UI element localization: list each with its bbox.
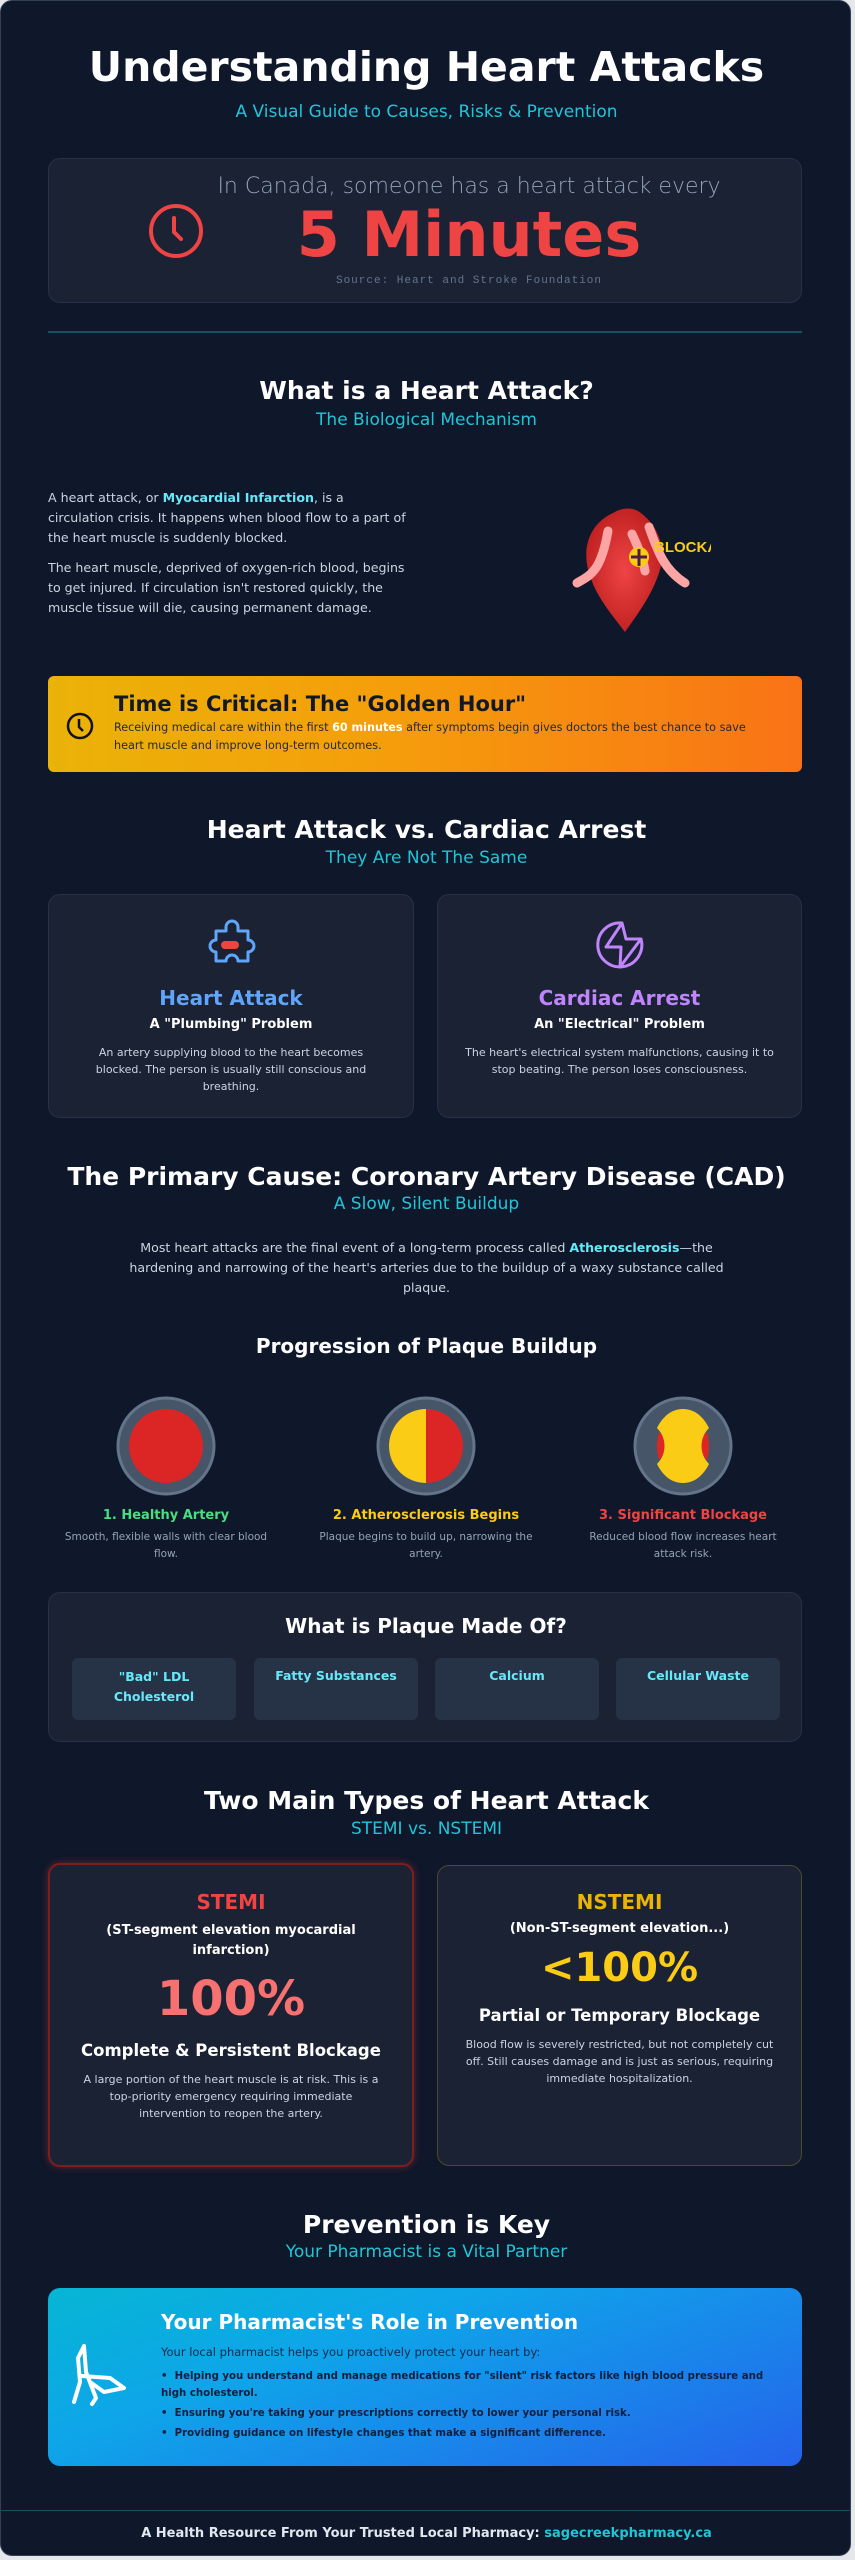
subheading: STEMI vs. NSTEMI — [351, 1819, 502, 1839]
panel: cardiac arrest: Cardiac Arrest — [539, 986, 700, 1010]
panel: heart attack — [48, 894, 414, 1118]
panel: STEMI: 100% — [157, 1971, 305, 2027]
panel: pharmacist role — [48, 2288, 802, 2466]
panel: STEMI: A large portion of the heart muscle is at risk. This is a top-priority emergency requiring immediate intervention to reopen the artery. — [84, 2073, 378, 2120]
icon: puzzle — [208, 920, 256, 962]
panel: cardiac arrest — [437, 894, 802, 1118]
subheading: Your Pharmacist is a Vital Partner — [286, 2242, 567, 2262]
callout text: Receiving medical care within the first 60 minutes after symptoms begin gives doctors the best chance to save heart muscle and improve long-term outcomes. — [114, 721, 746, 752]
text: role — [160, 2310, 763, 2439]
text: role: • Helping you understand and manage medications for "silent" risk factors like high blood pressure and high cholesterol. — [161, 2371, 763, 2399]
item: calcium — [435, 1658, 599, 1720]
callout: golden hour — [48, 676, 802, 772]
stat text: 5 Minutes — [297, 198, 641, 271]
title: Understanding Heart Attacks — [89, 43, 764, 91]
icon: lightning circle — [596, 921, 644, 968]
panel: STEMI: Complete & Persistent Blockage — [81, 2041, 381, 2060]
text block: mechanism — [48, 490, 406, 615]
icon: clock — [66, 712, 94, 740]
text block: mechanism: A heart attack, or Myocardial Infarction, is a circulation crisis. It happens when blood flow to a part of the heart muscle is suddenly blocked. — [48, 490, 406, 545]
panel: NSTEMI — [437, 1865, 802, 2166]
panel: cardiac arrest: An "Electrical" Problem — [534, 1017, 705, 1032]
heading: prevention: Prevention is Key — [303, 2210, 550, 2239]
callout text — [114, 692, 746, 752]
stage 3: 3. Significant Blockage — [599, 1508, 767, 1523]
stat text — [217, 174, 721, 287]
stage 2 — [319, 1396, 533, 1560]
icon: clock — [149, 204, 203, 258]
item: fatty — [254, 1658, 418, 1720]
item: calcium: Calcium — [489, 1668, 545, 1683]
heading: CAD: The Primary Cause: Coronary Artery Disease (CAD) — [67, 1162, 786, 1191]
stage 3: Reduced blood flow increases heart attack risk. — [589, 1531, 777, 1560]
item: LDL — [72, 1658, 236, 1720]
stage 2: Plaque begins to build up, narrowing the artery. — [319, 1531, 533, 1560]
panel: NSTEMI: NSTEMI — [577, 1890, 662, 1914]
icon: pharmacist figure — [72, 2344, 126, 2406]
item: cellular waste: Cellular Waste — [647, 1668, 749, 1683]
panel: NSTEMI: Blood flow is severely restricted, but not completely cut off. Still causes damage and is just as serious, requiring immediate hospitalization. — [466, 2038, 773, 2085]
text: role: Your local pharmacist helps you proactively protect your heart by: — [161, 2345, 540, 2359]
stage 3 — [589, 1396, 777, 1560]
footer: A Health Resource From Your Trusted Local Pharmacy: sagecreekpharmacy.ca — [141, 2526, 712, 2541]
item: fatty: Fatty Substances — [275, 1668, 397, 1683]
subtitle: A Visual Guide to Causes, Risks & Prevention — [235, 102, 618, 122]
stat text: In Canada, someone has a heart attack every — [217, 174, 721, 199]
text: role: • Ensuring you're taking your prescriptions correctly to lower your personal risk. — [161, 2408, 631, 2419]
panel: NSTEMI: Partial or Temporary Blockage — [479, 2006, 760, 2025]
subheading: A Slow, Silent Buildup — [334, 1194, 519, 1214]
panel: STEMI: (ST-segment elevation myocardial infarction) — [106, 1923, 356, 1958]
panel: NSTEMI: <100% — [541, 1945, 698, 1991]
item: LDL: "Bad" LDL — [119, 1669, 189, 1684]
stat text: Source: Heart and Stroke Foundation — [336, 275, 602, 287]
subheading: The Biological Mechanism — [316, 410, 537, 430]
stage 2: 2. Atherosclerosis Begins — [333, 1508, 519, 1523]
panel: plaque composition — [48, 1592, 802, 1742]
stage 1 — [65, 1396, 267, 1560]
chart: plaque stages — [65, 1396, 777, 1560]
heading: HA vs CA: Heart Attack vs. Cardiac Arrest — [207, 815, 646, 844]
panel: STEMI — [48, 1863, 414, 2167]
stage 1: Smooth, flexible walls with clear blood flow. — [65, 1531, 267, 1560]
panel: heart attack: An artery supplying blood to the heart becomes blocked. The person is usually still conscious and breathing. — [96, 1046, 366, 1093]
icon: heart with blockage — [572, 508, 711, 632]
callout text: Time is Critical: The "Golden Hour" — [114, 692, 526, 716]
heading: progression: Progression of Plaque Buildup — [256, 1334, 597, 1358]
text: role: • Providing guidance on lifestyle changes that make a significant difference. — [161, 2428, 606, 2439]
item: LDL: Cholesterol — [114, 1689, 194, 1704]
panel: NSTEMI: (Non-ST-segment elevation...) — [510, 1921, 729, 1936]
heading: two types: Two Main Types of Heart Attack — [204, 1786, 649, 1815]
stage 1: 1. Healthy Artery — [103, 1508, 229, 1523]
panel: cardiac arrest: The heart's electrical system malfunctions, causing it to stop beating. The person loses consciousness. — [465, 1046, 774, 1076]
panel: plaque composition: What is Plaque Made Of? — [285, 1614, 567, 1638]
text block: mechanism: The heart muscle, deprived of oxygen-rich blood, begins to get injured. If circulation isn't restored quickly, the muscle tissue will die, causing permanent damage. — [48, 560, 404, 615]
panel: heart attack: A "Plumbing" Problem — [150, 1017, 312, 1032]
subheading: They Are Not The Same — [326, 848, 527, 868]
text: role: Your Pharmacist's Role in Prevention — [161, 2310, 578, 2334]
heading: what is a heart attack: What is a Heart Attack? — [259, 376, 594, 405]
text block: atherosclerosis: Most heart attacks are the final event of a long-term process called Atherosclerosis—the hardening and narrowing of the heart's arteries due to the buildup of a waxy substance called plaque. — [129, 1240, 724, 1295]
panel: STEMI: STEMI — [196, 1890, 266, 1914]
stat panel — [48, 158, 802, 303]
panel: heart attack: Heart Attack — [159, 986, 303, 1010]
item: cellular waste — [616, 1658, 780, 1720]
